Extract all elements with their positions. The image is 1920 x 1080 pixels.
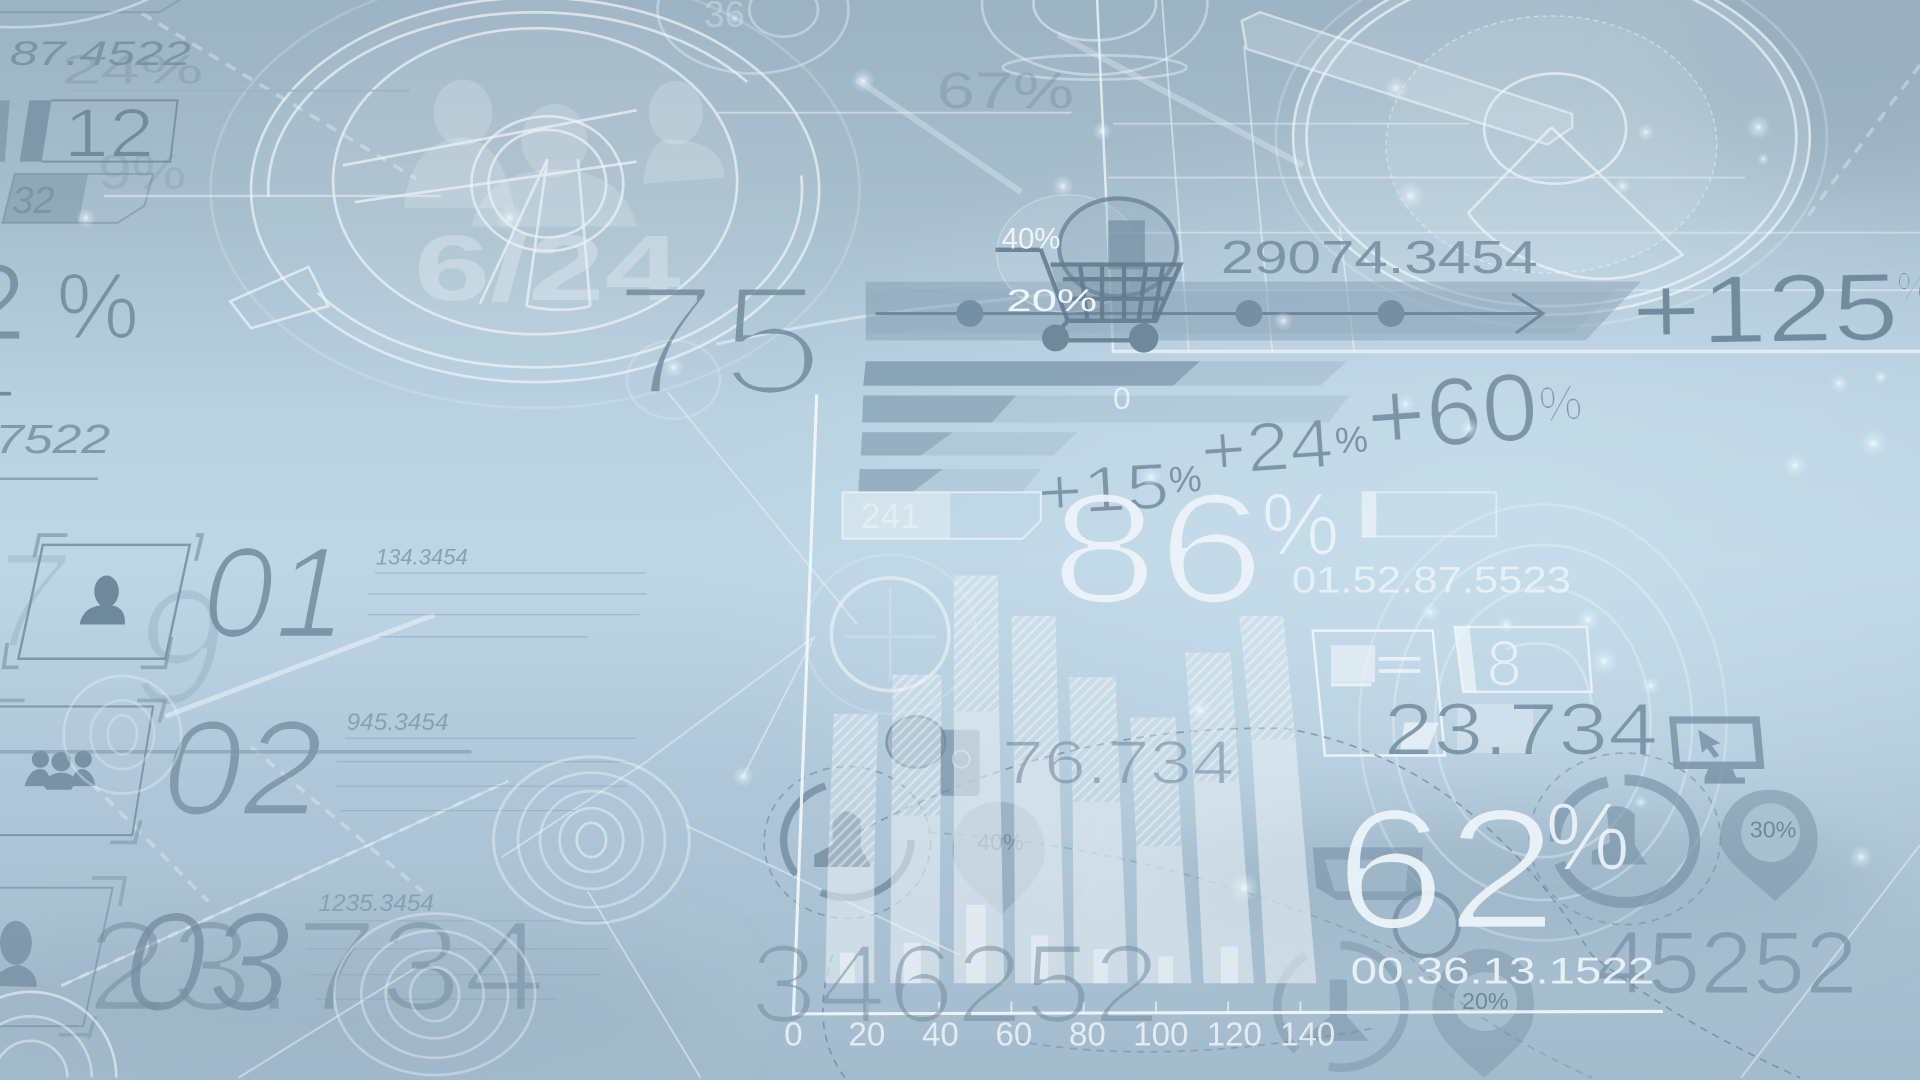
icon: woman xyxy=(80,576,125,624)
icon: shopping cart xyxy=(996,195,1180,353)
bokeh particles xyxy=(76,12,1888,902)
ring: clock near chart xyxy=(804,555,976,714)
number 62%: 62 xyxy=(1335,774,1558,965)
list item 02: 945.3454 xyxy=(347,709,449,736)
swirl rings xyxy=(0,340,720,1078)
labels: 40% 20%: 40% xyxy=(1002,223,1060,256)
axis labels: 140 xyxy=(1280,1017,1335,1054)
webcam outline: 67% xyxy=(937,61,1074,119)
icon: group xyxy=(24,751,96,790)
number 75: 75 xyxy=(612,253,825,428)
number 86%: 86 xyxy=(1051,461,1265,636)
icon: person xyxy=(0,921,37,987)
top-left readout block: 24% xyxy=(61,46,203,92)
gauge: user ring bottom xyxy=(1277,945,1404,1068)
list item 03: 23.734 xyxy=(86,895,546,1038)
growth percentages: % xyxy=(1334,418,1369,461)
pin: 20%: 20% xyxy=(1462,988,1509,1014)
icon: laptop and clock xyxy=(1313,847,1458,956)
text: 00.36.13.1522: 00.36.13.1522 xyxy=(1351,950,1654,991)
pin: 20% xyxy=(1432,949,1534,1078)
growth percentages: +60 xyxy=(1363,354,1541,472)
box: 12 xyxy=(0,95,178,172)
axis labels xyxy=(784,1017,1335,1054)
number +125%: +125 xyxy=(1631,254,1900,365)
ring: right clock circle xyxy=(1359,504,1727,940)
hatched bars xyxy=(828,576,1296,867)
axis labels: 40 xyxy=(922,1017,959,1054)
ring: pie gauge xyxy=(1242,0,1827,327)
top right grid panel xyxy=(1097,0,1920,351)
webcam outline xyxy=(716,0,1207,119)
number 29074.3454: 29074.3454 xyxy=(1221,231,1538,283)
list item 03: 03 xyxy=(122,883,291,1040)
number 23.734: 23.734 xyxy=(1384,687,1658,770)
number 86% xyxy=(1051,461,1340,636)
top-left readout block xyxy=(0,0,441,223)
top-left readout block: 87.4522 xyxy=(10,35,191,73)
growth percentages: +15 xyxy=(1035,450,1171,528)
number 62% xyxy=(1335,774,1630,965)
pin: 30%: 30% xyxy=(1750,817,1796,843)
list item 02 xyxy=(0,692,637,843)
axis labels: 80 xyxy=(1069,1017,1106,1054)
horizontal bars: 0 xyxy=(1113,380,1131,416)
labels: 40% 20%: 20% xyxy=(1007,282,1097,318)
gauge: user ring left xyxy=(764,767,931,918)
axis labels: 100 xyxy=(1133,1017,1188,1054)
top-left readout block: 9% xyxy=(98,146,186,200)
list item 01 xyxy=(4,522,647,667)
axis labels: 20 xyxy=(849,1017,885,1054)
small ring: 36 xyxy=(658,0,849,73)
number 76.734: 76.734 xyxy=(1002,729,1234,797)
number 62%: % xyxy=(1545,784,1630,890)
axis labels: 0 xyxy=(784,1017,803,1054)
horizontal bars xyxy=(858,361,1349,492)
list item 03 xyxy=(0,878,612,1040)
number 346252: 346252 xyxy=(749,920,1161,1046)
progress box right xyxy=(1362,492,1496,538)
text: 6/24: 6/24 xyxy=(414,216,681,320)
left percent: % xyxy=(56,254,139,358)
background numbers left: 9 xyxy=(132,555,224,740)
number 86%: % xyxy=(1261,475,1340,574)
background numbers left xyxy=(0,525,224,740)
list item 01: 01 xyxy=(202,522,347,665)
number 45252: 45252 xyxy=(1596,913,1858,1012)
icon boxes: 8 xyxy=(1487,629,1522,700)
icon boxes xyxy=(1313,627,1592,756)
growth percentages: % xyxy=(1537,376,1584,432)
gauge: user ring right xyxy=(1529,753,1720,924)
growth percentages: +24 xyxy=(1198,404,1335,490)
left percent xyxy=(0,241,139,479)
solid bars xyxy=(825,711,1316,983)
pin: 40% xyxy=(952,802,1045,916)
ring: people gauge xyxy=(211,0,860,408)
pin: 40%: 40% xyxy=(977,829,1024,855)
bar chart xyxy=(784,394,1663,1054)
text: 01.52.87.5523: 01.52.87.5523 xyxy=(1292,560,1571,601)
pin: 30% xyxy=(1720,790,1818,901)
axes xyxy=(793,394,1663,1014)
icon: monitor xyxy=(1669,716,1764,784)
icon: team of people xyxy=(404,80,725,227)
growth percentages xyxy=(1035,351,1586,528)
list item 03: 1235.3454 xyxy=(318,890,434,917)
list item 01: 134.3454 xyxy=(376,544,468,569)
list item 02: 02 xyxy=(162,692,323,843)
icon: magnifier and phone xyxy=(887,716,980,796)
timeline band with arrow xyxy=(866,282,1641,340)
box: 32 xyxy=(2,174,153,223)
growth percentages: % xyxy=(1168,458,1203,501)
labels: 40% 20% xyxy=(1002,223,1097,318)
progress box 241 xyxy=(842,492,1041,539)
box: 12: 12 xyxy=(64,95,154,172)
box: 32: 32 xyxy=(12,180,54,222)
axis labels: 60 xyxy=(995,1017,1032,1054)
inner bars xyxy=(840,905,1238,983)
dashed orbit curves xyxy=(823,728,1800,1078)
progress box 241: 241 xyxy=(861,496,920,536)
axis labels: 120 xyxy=(1207,1017,1262,1054)
